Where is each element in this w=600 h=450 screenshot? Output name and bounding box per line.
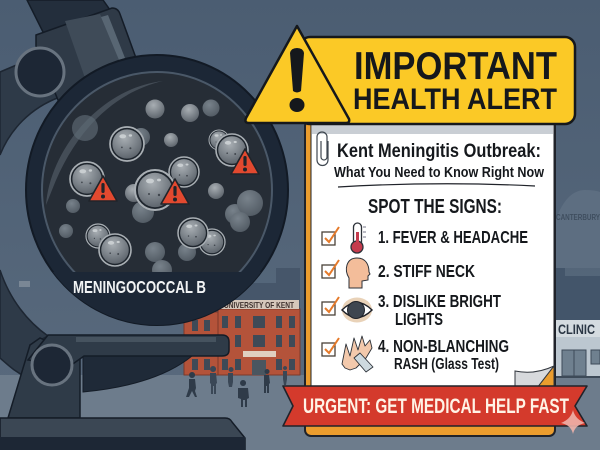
sign 3 text: 3. DISLIKE BRIGHT	[378, 291, 501, 311]
base	[0, 418, 245, 450]
page curl	[515, 366, 554, 388]
sparkle mark	[561, 410, 585, 434]
orange backing	[305, 120, 555, 436]
header alert banner	[245, 26, 575, 124]
paperclip	[317, 132, 328, 166]
sign 3	[322, 291, 501, 329]
warning triangle right	[231, 149, 259, 174]
pivot knob	[32, 345, 72, 385]
clinic building	[554, 320, 600, 378]
exclamation mark	[290, 48, 304, 112]
magnifying lens	[20, 55, 294, 332]
icon: hands and glass	[342, 336, 373, 372]
checkbox 2	[322, 260, 339, 278]
University of Kent building	[184, 300, 300, 375]
signs heading: SPOT THE SIGNS:	[368, 196, 502, 218]
card subtitle: What You Need to Know Right Now	[334, 164, 544, 181]
sign 4 second line: RASH (Glass Test)	[394, 356, 499, 373]
sign 2 text: 2. STIFF NECK	[378, 261, 475, 281]
title line 2: HEALTH ALERT	[353, 83, 557, 116]
microscope collar	[36, 8, 136, 105]
yellow title plate	[300, 37, 575, 124]
sign 4 text: 4. NON-BLANCHING	[378, 336, 509, 356]
sign 3 text: LIGHTS	[395, 309, 443, 329]
lens glare	[46, 81, 163, 205]
stand leg	[8, 338, 80, 418]
city skyline right	[554, 268, 600, 320]
checkbox 4	[322, 338, 339, 356]
sign 1	[322, 223, 528, 253]
icon: head and neck	[346, 258, 370, 288]
warning triangle centre	[161, 179, 189, 204]
checkbox 3	[322, 297, 339, 315]
alert card	[305, 120, 555, 436]
microscope dark outer arm	[0, 55, 60, 378]
bacteria cells	[59, 100, 263, 280]
ground	[0, 375, 600, 450]
title line 1: IMPORTANT	[354, 45, 557, 88]
warning triangle left	[89, 176, 117, 201]
sign 1 text: 1. FEVER & HEADACHE	[378, 227, 528, 247]
icon: thermometer	[351, 223, 366, 253]
focus knob	[16, 48, 64, 96]
people on campus	[186, 366, 287, 407]
lens holder	[83, 356, 192, 392]
pathogen label: MENINGOCOCCAL B	[73, 277, 206, 297]
icon: eye	[342, 298, 372, 322]
sign 2	[322, 258, 475, 288]
Canterbury hill and label	[554, 190, 600, 268]
city skyline left	[200, 268, 300, 375]
arm highlight	[19, 281, 30, 287]
warning triangle	[245, 26, 349, 123]
microscope tube	[27, 0, 120, 40]
card title: Kent Meningitis Outbreak:	[337, 141, 541, 162]
University of Kent building: UNIVERSITY OF KENT	[224, 300, 295, 310]
sign 4	[322, 336, 509, 373]
label band	[53, 272, 261, 325]
microscope body	[0, 0, 136, 378]
checkbox 1	[322, 227, 339, 245]
microscope stand	[0, 335, 245, 450]
urgent ribbon	[283, 386, 587, 426]
stage arm	[28, 335, 229, 366]
white paper	[311, 124, 554, 388]
